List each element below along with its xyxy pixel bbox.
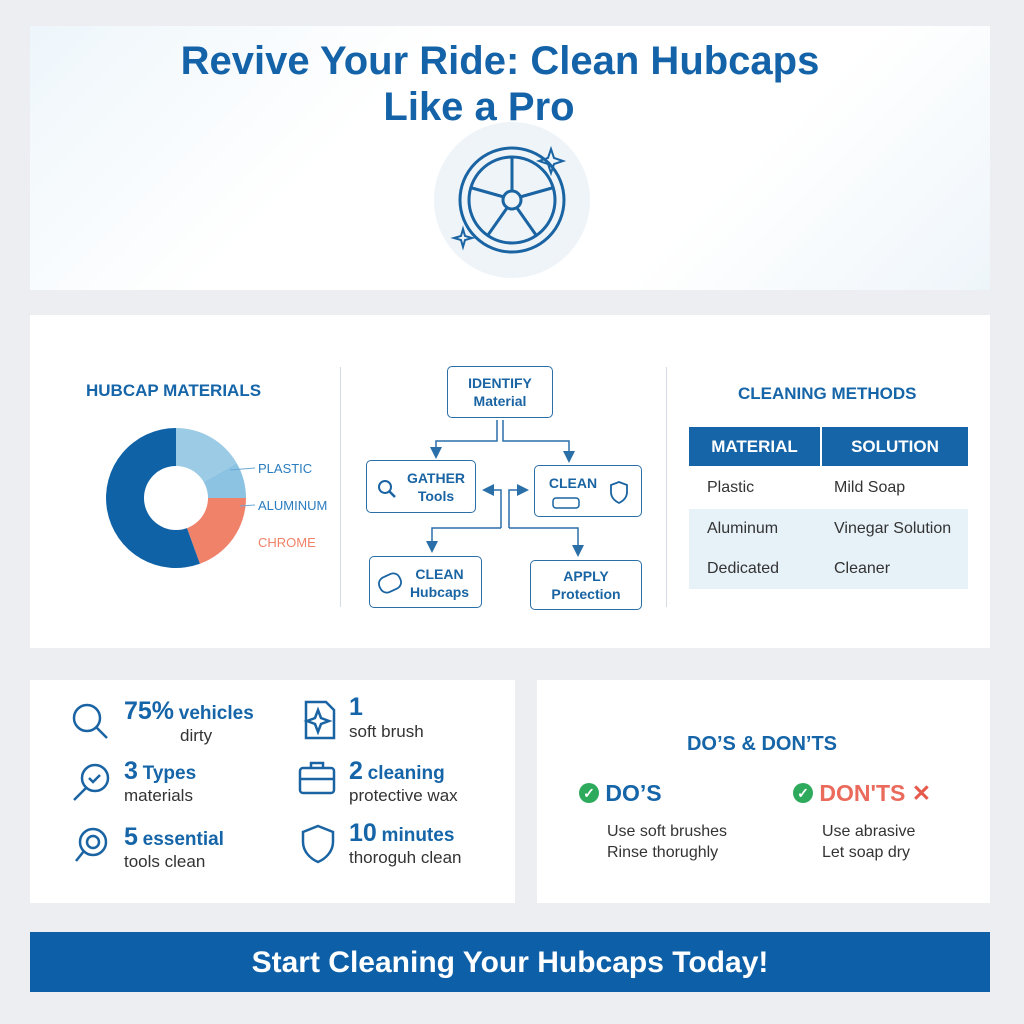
step: gather: Tools [418,488,454,504]
table: Aluminum [707,520,778,537]
stat: minutes: 10 minutes [349,819,454,847]
heading: DO’S & DON’TS [687,733,837,755]
step: clean hubcaps: CLEAN [415,566,464,582]
step: apply [530,560,642,610]
icons [72,700,336,864]
table: Vinegar Solution [834,520,951,537]
heading: hubcap materials: HUBCAP MATERIALS [86,381,261,400]
stat: types: materials [124,786,193,805]
don'ts column: ✓ [797,785,809,801]
banner [30,932,990,992]
step: clean: CLEAN [549,475,597,491]
stat: minutes: thoroguh clean [349,848,461,867]
panel: middle [30,315,990,648]
stat: vehicles [124,697,254,745]
stat: cleaning [349,757,458,805]
title: Like a Pro [383,85,575,129]
step: gather [366,460,476,513]
panel: header [30,26,990,290]
donut chart [106,428,327,568]
title [181,39,819,129]
step: identify [447,366,553,418]
step: gather: GATHER [407,470,465,486]
stat: tools [124,823,224,871]
stat: cleaning: 2 cleaning [349,757,445,785]
step: clean hubcaps: Hubcaps [410,584,469,600]
stat: types [124,757,196,805]
table: Mild Soap [834,479,905,496]
stat: tools: tools clean [124,852,205,871]
don'ts column: Use abrasive [822,823,915,840]
table: SOLUTION [851,437,939,456]
stat: brush: soft brush [349,722,424,741]
stat: types: 3 Types [124,757,196,785]
do's column: Use soft brushes [607,823,727,840]
stat: brush [349,693,424,741]
step: apply: Protection [551,586,621,602]
table: Plastic [707,479,754,496]
stat: vehicles: dirty [180,726,212,745]
step: identify: Material [474,393,526,409]
table: Cleaner [834,560,890,577]
table: MATERIAL [711,437,798,456]
step: clean [534,465,642,517]
do's column: Rinse thorughly [607,844,718,861]
table [689,427,968,589]
panel: dos and donts [537,680,990,903]
step: identify: IDENTIFY [468,375,532,391]
don'ts column: Let soap dry [822,844,910,861]
stat: brush: 1 [349,693,363,721]
donut chart: ALUMINUM [258,498,327,513]
donut chart: CHROME [258,535,316,550]
do's column: DO’S [605,780,662,806]
do's column: ✓ [583,785,595,801]
step: clean hubcaps [369,556,482,608]
table: Dedicated [707,560,779,577]
stat: cleaning: protective wax [349,786,458,805]
step: apply: APPLY [563,568,609,584]
don'ts column [793,780,931,861]
stat: vehicles: 75% vehicles [124,697,254,725]
do's column [579,780,727,861]
flowchart [366,366,642,610]
icon: wheel [434,122,590,278]
title: Revive Your Ride: Clean Hubcaps [181,39,819,83]
don'ts column: DON'TS ✕ [819,780,931,806]
stat: minutes [349,819,461,867]
donut chart: PLASTIC [258,461,312,476]
banner: Start Cleaning Your Hubcaps Today! [252,946,768,979]
stat: tools: 5 essential [124,823,224,851]
heading: cleaning methods: CLEANING METHODS [738,384,916,403]
panel: stats [30,680,515,903]
